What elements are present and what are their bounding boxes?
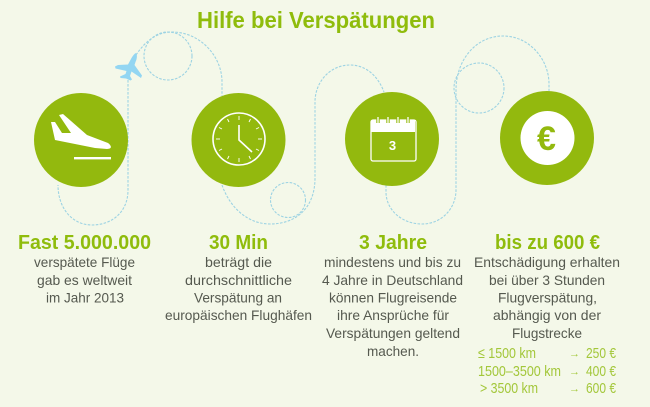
compensation table: 1500–3500 km bbox=[478, 363, 561, 380]
icon: airplane in flight bbox=[115, 53, 142, 80]
icon: euro bbox=[500, 91, 594, 185]
compensation table: 600 € bbox=[586, 380, 617, 397]
description: können Flugreisende bbox=[329, 290, 457, 306]
icon: euro: € bbox=[537, 120, 556, 158]
icon: calendar bbox=[345, 92, 439, 186]
description: gab es weltweit bbox=[37, 272, 132, 288]
description: bei über 3 Stunden bbox=[489, 272, 605, 288]
dashed flight path bbox=[58, 32, 549, 225]
compensation table: → bbox=[569, 383, 580, 395]
panel: average delay bbox=[165, 93, 312, 323]
stat heading: Fast 5.000.000 bbox=[18, 232, 151, 254]
icon: clock bbox=[192, 93, 286, 187]
compensation table: 400 € bbox=[586, 363, 617, 380]
icon: landing plane bbox=[34, 93, 128, 187]
description bbox=[165, 254, 312, 323]
panel: compensation bbox=[474, 91, 620, 397]
description: mindestens und bis zu bbox=[324, 254, 461, 270]
compensation table: > 3500 km bbox=[480, 380, 538, 397]
panel: flights bbox=[18, 93, 151, 306]
description: europäischen Flughäfen bbox=[165, 307, 312, 323]
compensation table: 250 € bbox=[586, 345, 617, 362]
compensation table: → bbox=[569, 348, 580, 360]
compensation table bbox=[478, 345, 617, 397]
description bbox=[474, 254, 620, 341]
icon: calendar: 3 bbox=[389, 138, 396, 153]
description: Flugverspätung, bbox=[498, 290, 597, 306]
compensation table: → bbox=[569, 366, 580, 378]
description: verspätete Flüge bbox=[34, 254, 135, 270]
description bbox=[322, 254, 463, 359]
description: ihre Ansprüche für bbox=[337, 307, 449, 323]
description: im Jahr 2013 bbox=[46, 290, 124, 306]
description bbox=[34, 254, 135, 306]
title: Hilfe bei Verspätungen bbox=[197, 7, 435, 33]
description: 4 Jahre in Deutschland bbox=[322, 272, 463, 288]
description: Verspätung an bbox=[194, 290, 282, 306]
stat heading: 30 Min bbox=[209, 232, 268, 254]
description: Entschädigung erhalten bbox=[474, 254, 620, 270]
description: abhängig von der bbox=[493, 307, 601, 323]
description: machen. bbox=[367, 343, 419, 359]
compensation table: ≤ 1500 km bbox=[478, 345, 536, 362]
description: Verspätungen geltend bbox=[326, 325, 460, 341]
stat heading: 3 Jahre bbox=[359, 232, 427, 254]
description: beträgt die bbox=[205, 254, 272, 270]
description: Flugstrecke bbox=[512, 325, 582, 341]
stat heading: bis zu 600 € bbox=[495, 232, 600, 254]
description: durchschnittliche bbox=[185, 272, 292, 288]
panel: claim period bbox=[322, 92, 463, 359]
